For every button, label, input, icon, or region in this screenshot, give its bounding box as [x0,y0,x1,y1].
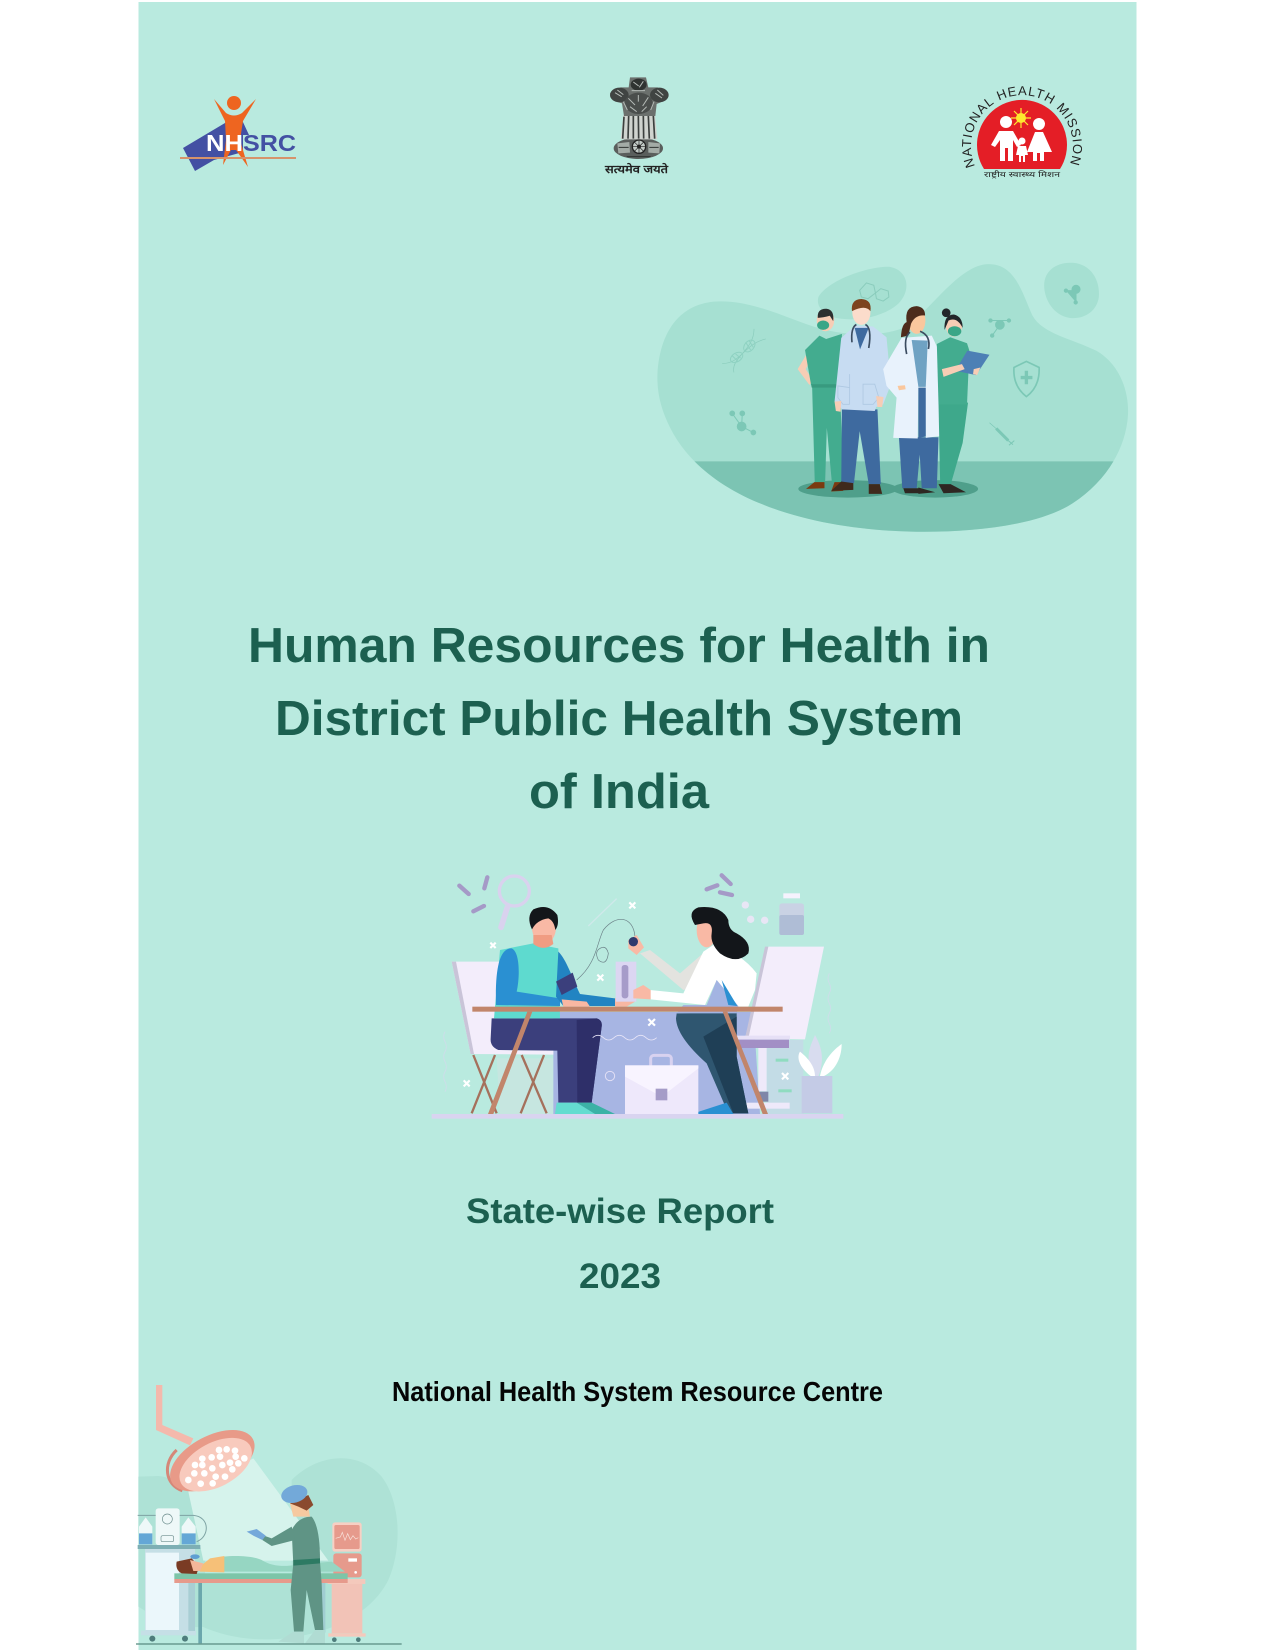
male doctor [831,299,891,494]
left nurse [798,309,844,492]
illustration: operating theatre [136,1385,402,1645]
logo: NHSRC: NH [206,130,243,156]
cover page [136,2,1136,1650]
right nurse [937,308,989,493]
ground line [136,1643,402,1645]
left chair [452,962,553,1113]
shadows [798,480,978,498]
suction machine [138,1508,206,1642]
operating lamp [156,1385,328,1561]
table [472,1007,783,1114]
logo: NHSRC [180,96,296,171]
surgeon [247,1482,325,1643]
operating table and patient [174,1554,348,1643]
logo: NHSRC: SRC [243,130,296,156]
logo: National Health Mission: राष्ट्रीय स्वास्थ्य मिशन [984,170,1061,179]
logo: national emblem of India [604,77,669,176]
medicine bottle [779,893,804,935]
patient monitor [328,1522,366,1642]
title: of India [529,764,709,819]
haze and wavy side lines [444,973,831,1114]
background blobs [657,263,1128,532]
magnifying glass and pills [459,875,768,927]
briefcase [593,1035,698,1114]
floor line [432,1114,843,1119]
logo: national emblem of India: सत्यमेव जयते [604,162,669,176]
background icons: molecules, DNA, shield, syringe [722,283,1080,445]
title: District Public Health System [275,691,963,746]
illustration: doctor and patient consultation [432,875,843,1119]
publisher: National Health System Resource Centre [392,1376,883,1407]
floor [694,461,1114,532]
subtitle: report type: State-wise Report [466,1192,774,1231]
female doctor [883,306,942,494]
desk back panel [553,1012,760,1114]
title [248,618,990,819]
illustration: medical team [657,263,1128,532]
background shapes [138,1458,398,1639]
title: Human Resources for Health in [248,618,990,673]
right chair [710,947,824,1109]
doctor [628,907,757,1114]
panel: cover background [138,2,1136,1650]
patient [491,907,637,1114]
plant [798,1035,842,1113]
blood pressure monitor [577,919,636,1002]
logo: National Health Mission: NATIONAL HEALTH MISSION [962,86,1082,168]
subtitle: year: 2023 [579,1257,661,1296]
cross decorations [464,902,788,1086]
